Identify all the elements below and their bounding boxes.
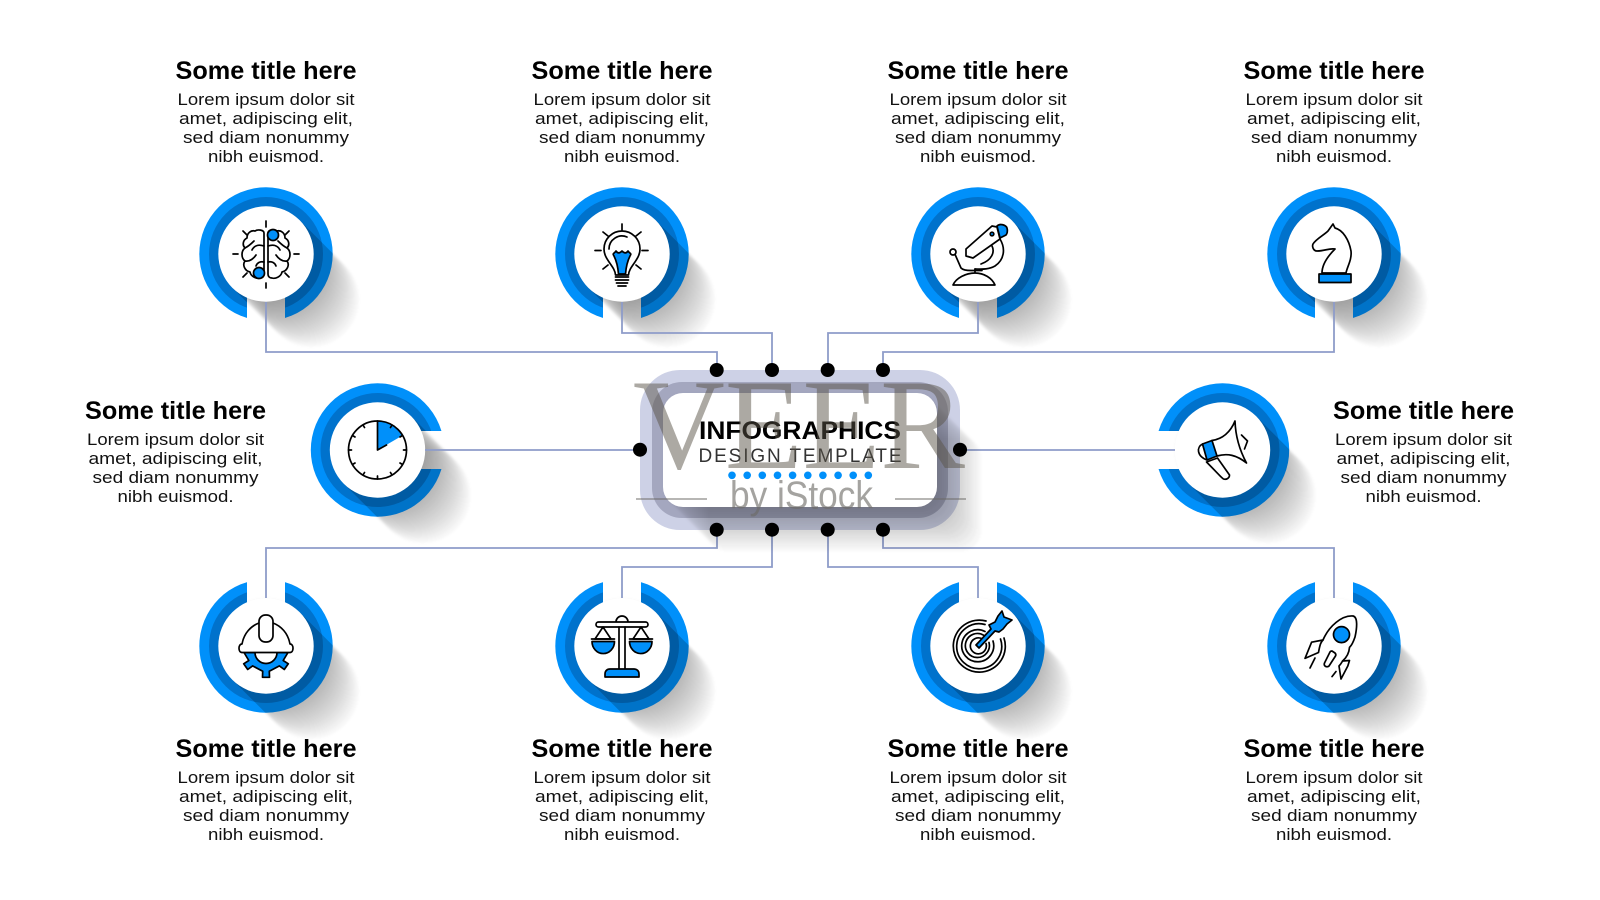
text block: top 3 [888, 57, 1069, 166]
center title: INFOGRAPHICS [699, 417, 901, 445]
node: light bulb [555, 187, 713, 345]
text block: bottom 2: amet, adipiscing elit, [535, 787, 709, 806]
text block: top 4: Some title here [1243, 57, 1425, 85]
text block: right: nibh euismod. [1366, 487, 1482, 506]
node: microscope [911, 187, 1069, 345]
icon: megaphone [1198, 421, 1248, 479]
text block: bottom 1: amet, adipiscing elit, [179, 787, 353, 806]
text block: top 1: nibh euismod. [208, 147, 324, 166]
center panel [640, 370, 981, 551]
icon: chess knight [1313, 224, 1351, 282]
text block: left: amet, adipiscing elit, [88, 449, 262, 468]
text block: bottom 2 [532, 735, 713, 844]
text block: top 2: Lorem ipsum dolor sit [534, 90, 711, 109]
text block: bottom 4: amet, adipiscing elit, [1247, 787, 1421, 806]
text block: right: sed diam nonummy [1341, 468, 1507, 487]
text block: top 2: amet, adipiscing elit, [535, 109, 709, 128]
text block: bottom 1 [176, 735, 357, 844]
node: megaphone [1158, 383, 1314, 541]
text block: top 1: sed diam nonummy [183, 128, 350, 147]
text block: top 2: nibh euismod. [564, 147, 680, 166]
icon: microscope [950, 225, 1007, 285]
connector lines [266, 302, 1334, 598]
text block: bottom 1: Lorem ipsum dolor sit [178, 768, 355, 787]
text block: top 2 [532, 57, 713, 166]
text block: top 4: sed diam nonummy [1251, 128, 1418, 147]
node: helmet and gear [199, 582, 357, 737]
text block: right: Some title here [1333, 397, 1514, 425]
text block: bottom 3: nibh euismod. [920, 825, 1036, 844]
icon: clock [348, 421, 406, 479]
text block: bottom 2: Some title here [531, 735, 713, 763]
text block: bottom 4: nibh euismod. [1276, 825, 1392, 844]
text block: top 1: amet, adipiscing elit, [179, 109, 353, 128]
node: rocket [1267, 582, 1425, 737]
text block: top 3: Some title here [887, 57, 1069, 85]
text block: top 1: Some title here [175, 57, 357, 85]
text block: left: Lorem ipsum dolor sit [87, 430, 264, 449]
text block: top 3: nibh euismod. [920, 147, 1036, 166]
text block: right: Lorem ipsum dolor sit [1335, 430, 1512, 449]
text block: bottom 1: Some title here [175, 735, 357, 763]
icon: helmet and gear [239, 615, 293, 677]
text block: top 3: amet, adipiscing elit, [891, 109, 1065, 128]
icon: brain [233, 221, 299, 288]
text block: bottom 3: Lorem ipsum dolor sit [890, 768, 1067, 787]
text block: top 1 [176, 57, 357, 166]
text block: bottom 3: amet, adipiscing elit, [891, 787, 1065, 806]
text block: bottom 4: Some title here [1243, 735, 1425, 763]
node: target [911, 582, 1069, 737]
text block: top 4 [1244, 57, 1425, 166]
dotted divider [728, 472, 872, 479]
text block: top 1: Lorem ipsum dolor sit [178, 90, 355, 109]
text block: bottom 2: sed diam nonummy [539, 806, 706, 825]
text block: bottom 1: nibh euismod. [208, 825, 324, 844]
icon: light bulb [595, 224, 648, 286]
icon: rocket [1305, 616, 1357, 679]
text block: bottom 4: Lorem ipsum dolor sit [1246, 768, 1423, 787]
text block: top 3: sed diam nonummy [895, 128, 1062, 147]
text block: bottom 2: nibh euismod. [564, 825, 680, 844]
text block: bottom 3: sed diam nonummy [895, 806, 1062, 825]
text block: left [85, 397, 266, 506]
text block: bottom 4: sed diam nonummy [1251, 806, 1418, 825]
text block: top 4: nibh euismod. [1276, 147, 1392, 166]
node: scales [555, 582, 713, 737]
text block: right [1333, 397, 1514, 506]
center subtitle: DESIGN TEMPLATE [698, 446, 902, 467]
watermark: by iStock [730, 474, 873, 518]
text block: top 2: sed diam nonummy [539, 128, 706, 147]
text block: bottom 4 [1244, 735, 1425, 844]
text block: left: sed diam nonummy [93, 468, 259, 487]
text block: bottom 1: sed diam nonummy [183, 806, 350, 825]
node: chess knight [1267, 187, 1425, 345]
text block: top 3: Lorem ipsum dolor sit [890, 90, 1067, 109]
icon: target with arrow [953, 611, 1012, 672]
text block: left: Some title here [85, 397, 266, 425]
node: clock [310, 383, 468, 541]
icon: scales [592, 616, 652, 677]
text block: bottom 2: Lorem ipsum dolor sit [534, 768, 711, 787]
text block: top 2: Some title here [531, 57, 713, 85]
text block: top 4: Lorem ipsum dolor sit [1246, 90, 1423, 109]
text block: bottom 3 [888, 735, 1069, 844]
text block: top 4: amet, adipiscing elit, [1247, 109, 1421, 128]
text block: right: amet, adipiscing elit, [1336, 449, 1510, 468]
node: brain [199, 187, 357, 345]
text block: bottom 3: Some title here [887, 735, 1069, 763]
connector dots [633, 363, 967, 537]
text block: left: nibh euismod. [118, 487, 234, 506]
watermark: VEER [633, 353, 965, 496]
